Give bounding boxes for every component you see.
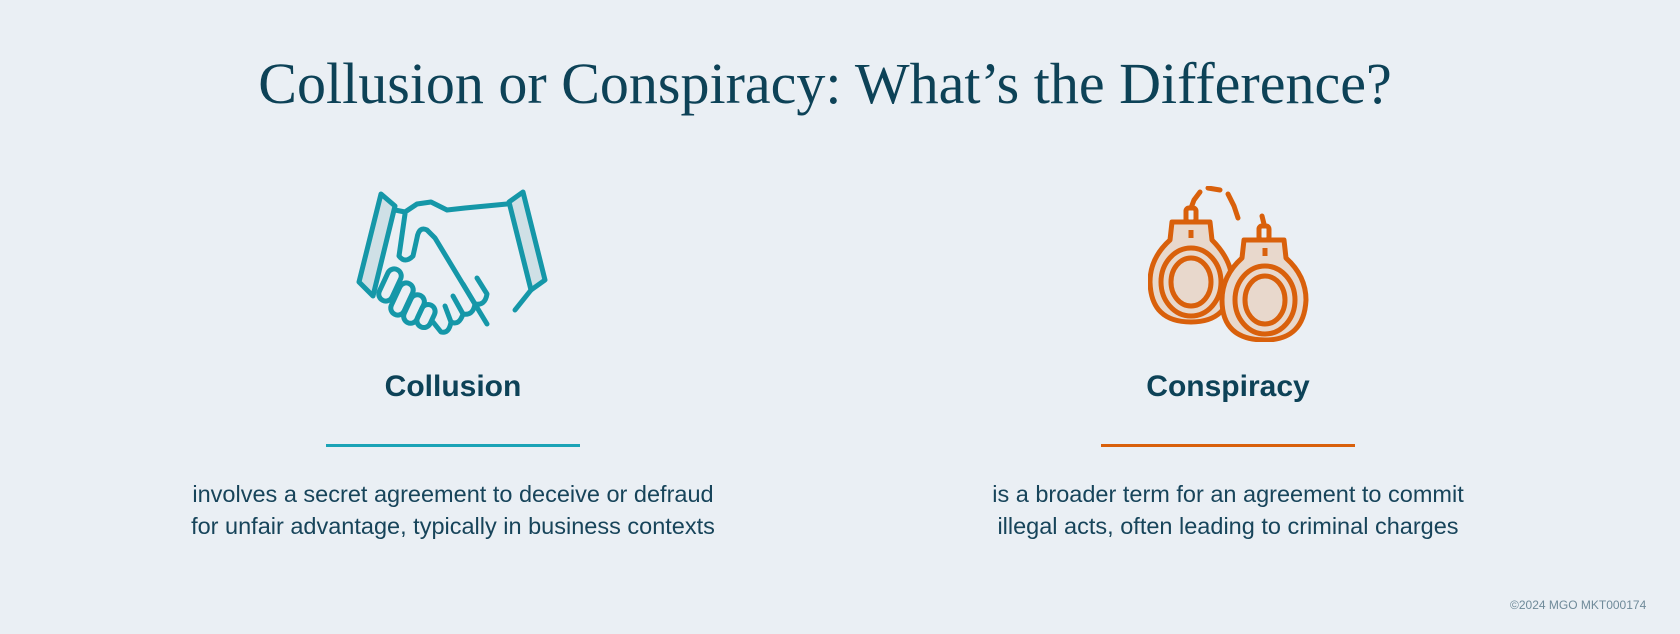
icon: handshake: [356, 190, 548, 335]
text: collusion description: [191, 481, 715, 539]
copyright: ©2024 MGO MKT000174: [1510, 598, 1646, 612]
text: conspiracy description: is a broader term for an agreement to commit: [992, 481, 1464, 507]
text: conspiracy description: [992, 481, 1464, 539]
divider: collusion teal: [326, 444, 580, 447]
text: collusion description: involves a secret agreement to deceive or defraud: [192, 481, 714, 507]
text: collusion description: for unfair advantage, typically in business contexts: [191, 513, 715, 539]
divider: conspiracy orange: [1101, 444, 1355, 447]
heading: collusion: Collusion: [385, 370, 521, 403]
heading: conspiracy: Conspiracy: [1146, 370, 1310, 403]
icon: handcuffs: [1148, 186, 1308, 342]
text: conspiracy description: illegal acts, often leading to criminal charges: [997, 513, 1459, 539]
title: Collusion or Conspiracy: What’s the Difference?: [258, 51, 1392, 116]
